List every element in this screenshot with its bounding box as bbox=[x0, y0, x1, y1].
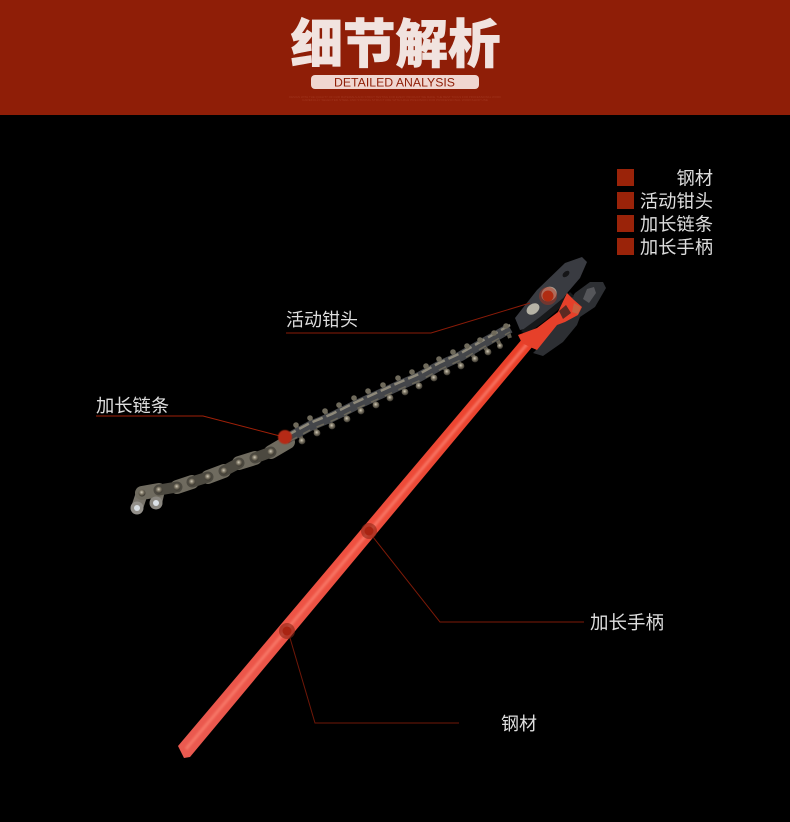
subtitle pill bbox=[311, 75, 479, 90]
leader: steel bbox=[290, 638, 537, 734]
marker: extended chain bbox=[278, 430, 292, 444]
marker: steel bbox=[279, 623, 295, 639]
chain bbox=[130, 323, 510, 514]
label: steel: 钢材 bbox=[501, 714, 537, 734]
marker: extended handle bbox=[361, 523, 377, 539]
legend bbox=[617, 168, 713, 258]
header band bbox=[0, 0, 790, 115]
leader: movable jaw bbox=[286, 303, 530, 333]
chain: studded upper section bbox=[286, 323, 510, 444]
legend item: extended chain: 加长链条 bbox=[640, 214, 713, 234]
fine print: DESIGN WITH THE QUALITY OF OUR MATERIALS AND STRICT TESTING FOR EVERY PRODUCT WE MAKE, THE BEST TOOLS FOR PROFESSIONAL WORK bbox=[289, 95, 501, 99]
upper jaw bbox=[515, 257, 587, 330]
legend item: movable jaw: 活动钳头 bbox=[640, 190, 713, 212]
subtitle pill: DETAILED ANALYSIS bbox=[334, 76, 455, 90]
marker: movable jaw bbox=[539, 287, 557, 305]
label: extended handle: 加长手柄 bbox=[590, 612, 664, 633]
title: 细节解析 bbox=[290, 16, 501, 74]
label: movable jaw: 活动钳头 bbox=[286, 310, 358, 330]
leader: extended handle bbox=[373, 537, 664, 633]
leader: extended chain bbox=[96, 395, 280, 436]
legend item: steel: 钢材 bbox=[676, 168, 713, 188]
legend item: extended handle: 加长手柄 bbox=[640, 236, 713, 258]
red body bbox=[518, 293, 582, 350]
fine print: CAREFULLY SELECTED STEEL AND STRONG STRUCTURE WITH HIGH PRECISION FOR PROFESSIONAL WORKSHOP USE bbox=[302, 98, 488, 102]
chain: flat lower section bbox=[130, 442, 288, 514]
pipe wrench head bbox=[515, 257, 606, 356]
handle bbox=[178, 338, 533, 758]
lower jaw bbox=[533, 282, 606, 356]
fine print bbox=[289, 95, 501, 102]
label: extended chain: 加长链条 bbox=[96, 395, 169, 416]
